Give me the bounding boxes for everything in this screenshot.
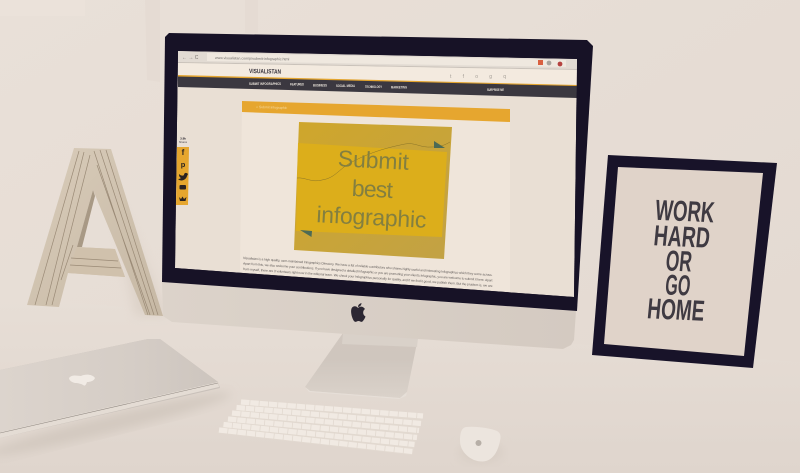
desk surface bbox=[0, 297, 800, 473]
intro paragraph: Apart from this, we also welcome your contributions. If you have designed a detailed Infographic or you are promoting your client's Infographic, you are welcome to submit it here. Apart bbox=[243, 262, 493, 283]
intro paragraph bbox=[243, 256, 493, 288]
poster paper bbox=[604, 167, 763, 356]
breadcrumb bar bbox=[242, 101, 510, 122]
breadcrumb bar: ⌂ Submit Infographic bbox=[256, 105, 288, 110]
intro paragraph: from myself, there are 3 volunteers right now in the editorial team. We check your Infographics personally for quality, and if we find it good, we publish them. But the problem is, we are bbox=[243, 267, 493, 288]
icon: laptop apple logo bbox=[69, 375, 95, 386]
poster slogan: HOME bbox=[646, 293, 706, 328]
screen bbox=[175, 51, 577, 297]
browser toolbar bbox=[178, 51, 577, 70]
navigation bar bbox=[178, 75, 577, 98]
keyboard bbox=[217, 399, 424, 455]
poster slogan: OR bbox=[664, 246, 693, 279]
site header bbox=[178, 63, 577, 85]
navigation bar: TECHNOLOGY bbox=[365, 85, 382, 89]
corner triangle bottom bbox=[300, 230, 312, 237]
yellow text panel bbox=[296, 143, 447, 237]
heading text: Submit bbox=[337, 145, 410, 175]
social share sidebar: Shares bbox=[179, 140, 188, 144]
site header: VISUALISTAN bbox=[249, 68, 282, 76]
poster frame bbox=[592, 155, 777, 368]
social share sidebar: f bbox=[182, 148, 185, 157]
poster slogan: HARD bbox=[652, 220, 711, 255]
laptop bbox=[0, 339, 233, 463]
browser toolbar: www.visualistan.com/p/submit-infographic.html bbox=[215, 56, 290, 61]
wooden letter A bbox=[27, 148, 168, 316]
framed poster bbox=[592, 155, 777, 368]
corner triangle top bbox=[434, 141, 445, 148]
site header: t f o g q bbox=[450, 74, 506, 80]
poster slogan: GO bbox=[664, 270, 692, 303]
browser toolbar: ← → C bbox=[182, 55, 199, 61]
content column bbox=[240, 101, 510, 292]
monitor black bezel bbox=[162, 33, 593, 311]
heading text bbox=[318, 150, 426, 231]
page background bbox=[175, 51, 577, 297]
poster slogan: WORK bbox=[654, 195, 716, 229]
monitor bbox=[162, 33, 593, 349]
intro paragraph: Visualistan is a high quality, user-maintained Infographics Directory. We have a list of reliable contributors who shares highly useful and interesting Infographics which they come across. bbox=[243, 256, 493, 277]
social share sidebar: 3.8k bbox=[180, 136, 186, 140]
wall crack bbox=[297, 142, 450, 181]
heading text: infographic bbox=[316, 201, 427, 233]
social share sidebar bbox=[176, 136, 189, 205]
monitor stand bbox=[305, 333, 418, 399]
navigation bar: MARKETING bbox=[391, 86, 407, 90]
poster slogan bbox=[646, 195, 716, 328]
navigation bar: SOCIAL MEDIA bbox=[336, 84, 355, 88]
navigation bar: SUBMIT INFOGRAPHICS bbox=[249, 82, 281, 86]
heading text: best bbox=[351, 175, 394, 203]
mouse bbox=[459, 427, 503, 463]
submit infographic image bbox=[294, 122, 452, 259]
navigation bar: BUSINESS bbox=[313, 83, 327, 87]
navigation bar: FEATURED bbox=[290, 83, 304, 87]
navigation bar: SURPRISE ME bbox=[487, 88, 504, 92]
monitor chin bbox=[162, 282, 576, 349]
icon: monitor apple logo bbox=[351, 303, 366, 322]
social share sidebar: p bbox=[181, 160, 186, 169]
